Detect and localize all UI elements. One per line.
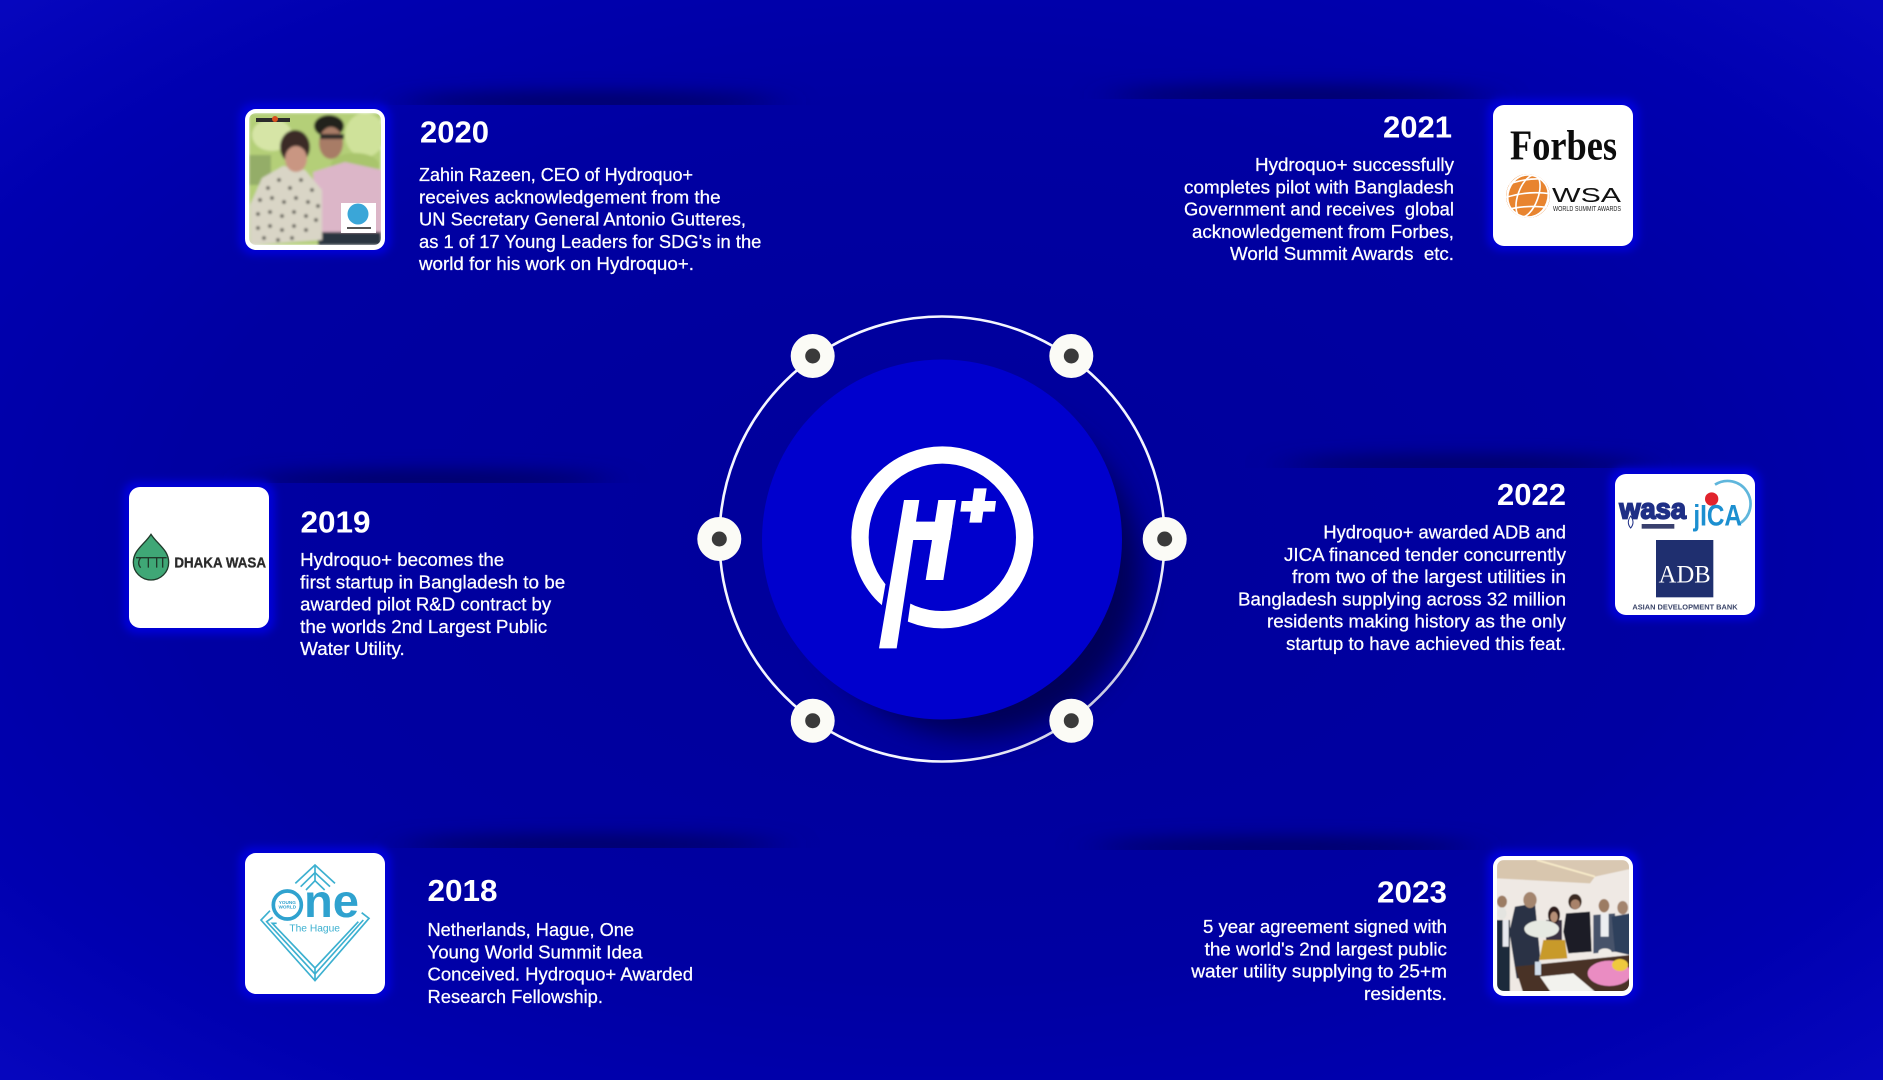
description: Research Fellowship. xyxy=(428,987,603,1007)
orbit ring xyxy=(720,316,1164,762)
description: 5 year agreement signed with xyxy=(1203,917,1447,937)
description xyxy=(1184,155,1454,264)
logo: Dhaka WASA xyxy=(123,481,275,634)
description: JICA financed tender concurrently xyxy=(1284,545,1566,565)
description: Netherlands, Hague, One xyxy=(428,920,634,940)
logos: WASA, JICA, ADB: ADB xyxy=(1659,561,1711,589)
description: as 1 of 17 Young Leaders for SDG's in the xyxy=(419,232,761,252)
description: Zahin Razeen, CEO of Hydroquo+ xyxy=(419,165,693,185)
card: 2021 xyxy=(1184,99,1639,264)
year: 2018 xyxy=(428,873,498,908)
card: 2020 xyxy=(239,103,761,274)
logos: Forbes and WSA: WSA xyxy=(1552,185,1622,207)
description: water utility supplying to 25+m xyxy=(1190,962,1447,982)
logos: Forbes and WSA: Forbes xyxy=(1510,124,1617,170)
description: acknowledgement from Forbes, xyxy=(1192,222,1454,242)
logos: Forbes and WSA xyxy=(1487,99,1639,251)
description: Hydroquo+ awarded ADB and xyxy=(1323,522,1566,542)
logos: WASA, JICA, ADB: wasa xyxy=(1618,493,1687,525)
year: 2021 xyxy=(1383,110,1452,144)
description: the worlds 2nd Largest Public xyxy=(300,617,547,637)
description: UN Secretary General Antonio Gutteres, xyxy=(419,210,746,230)
description xyxy=(418,165,761,274)
description: first startup in Bangladesh to be xyxy=(300,572,565,592)
description: residents. xyxy=(1364,984,1447,1004)
card: 2019 xyxy=(123,481,565,659)
description: Government and receives global xyxy=(1184,200,1454,220)
logo: One Young World The Hague: WORLD xyxy=(279,905,297,910)
shadows above cards xyxy=(250,87,1645,856)
logos: Forbes and WSA: WORLD SUMMIT AWARDS xyxy=(1553,206,1621,213)
description: awarded pilot R&D contract by xyxy=(300,595,551,615)
year: 2020 xyxy=(420,114,489,150)
description: Hydroquo+ successfully xyxy=(1255,155,1454,175)
orbit nodes xyxy=(697,334,1187,743)
description: Bangladesh supplying across 32 million xyxy=(1238,589,1566,609)
photo: agreement signing xyxy=(1487,850,1639,1001)
description: receives acknowledgement from the xyxy=(419,187,721,207)
description: startup to have achieved this feat. xyxy=(1286,634,1566,654)
card: 2022 xyxy=(1238,468,1761,654)
inner circle shadow xyxy=(808,405,1140,737)
description: completes pilot with Bangladesh xyxy=(1184,177,1454,197)
description: Water Utility. xyxy=(300,639,405,659)
logo: One Young World The Hague: YOUNG xyxy=(279,900,296,905)
logo: One Young World The Hague xyxy=(239,847,391,999)
description: residents making history as the only xyxy=(1267,612,1566,632)
description xyxy=(1190,917,1447,1004)
description: the world's 2nd largest public xyxy=(1205,939,1447,959)
card: 2023 xyxy=(1190,850,1639,1004)
description: from two of the largest utilities in xyxy=(1292,567,1566,587)
logos: WASA, JICA, ADB: jICA xyxy=(1693,500,1742,533)
description: Conceived. Hydroquo+ Awarded xyxy=(428,965,693,985)
description: Young World Summit Idea xyxy=(428,942,644,962)
logos: WASA, JICA, ADB: ASIAN DEVELOPMENT BANK xyxy=(1632,604,1738,611)
description: World Summit Awards etc. xyxy=(1230,244,1454,264)
description: world for his work on Hydroquo+. xyxy=(418,254,694,274)
description xyxy=(428,920,693,1007)
card: 2018 xyxy=(239,847,693,1007)
description xyxy=(1238,522,1566,654)
logo: H+ xyxy=(860,455,1025,648)
description xyxy=(300,550,565,659)
central diagram xyxy=(697,316,1187,762)
photo: CEO with UN logo xyxy=(239,103,391,255)
logo: Dhaka WASA: DHAKA WASA xyxy=(174,554,266,571)
description: Hydroquo+ becomes the xyxy=(300,550,504,570)
year: 2023 xyxy=(1377,874,1447,910)
inner circle xyxy=(762,360,1122,720)
year: 2022 xyxy=(1497,477,1566,512)
year: 2019 xyxy=(300,504,370,540)
logos: WASA, JICA, ADB xyxy=(1609,468,1761,620)
logo: One Young World The Hague: ne xyxy=(304,875,359,927)
logo: One Young World The Hague: The Hague xyxy=(289,924,340,935)
